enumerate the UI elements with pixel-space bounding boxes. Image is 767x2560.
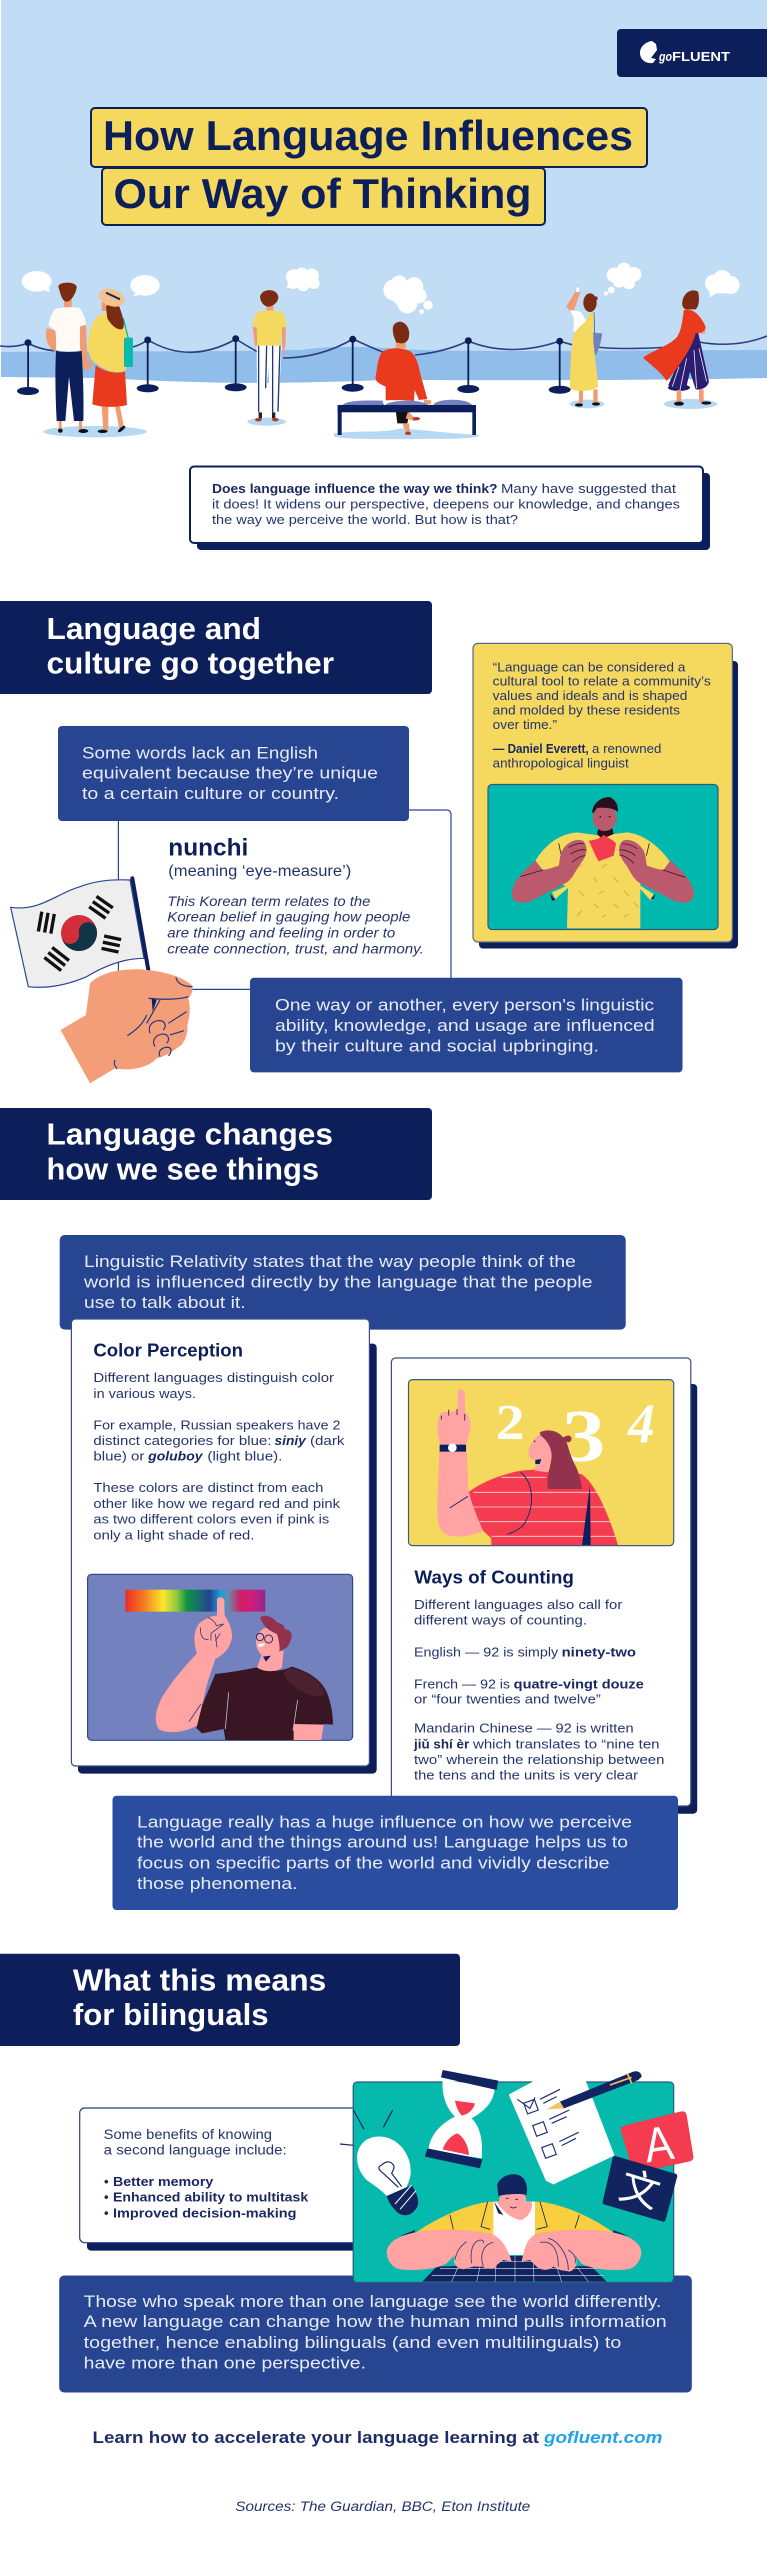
panel: benefits of a second language: • [104, 2205, 109, 2220]
panel: Daniel Everett quote: anthropological linguist [493, 756, 629, 770]
callout: culture and upbringing [250, 978, 682, 1072]
definition: nunchi: nunchi [168, 834, 248, 862]
panel: color perception: siniy [274, 1433, 307, 1448]
panel: ways of counting: French — 92 is [414, 1676, 511, 1691]
panel: ways of counting: two” wherein the relationship between [414, 1752, 664, 1767]
panel: ways of counting: jiǔ shí èr [413, 1736, 469, 1751]
panel: benefits of a second language: Improved decision-making [113, 2205, 297, 2220]
illustration: person typing with hourglass, bulb, checklist and language cards [340, 2070, 693, 2282]
panel: color perception: other like how we regard red and pink [93, 1496, 341, 1511]
callout: speakers of more than one language: Those who speak more than one language see the world differently. [84, 2292, 661, 2311]
panel: benefits of a second language: • [104, 2190, 109, 2204]
icon: hand holding South Korean flag [11, 878, 193, 1083]
heading: language and culture [0, 601, 432, 694]
callout: speakers of more than one language: together, hence enabling bilinguals (and even multilinguals) to [84, 2333, 621, 2352]
panel: color perception: as two different colors even if pink is [93, 1512, 330, 1527]
illustration: woman counting with raised finger: 2 [496, 1394, 525, 1449]
logo: goFLUENT [617, 29, 767, 77]
panel: ways of counting: or “four twenties and twelve” [414, 1692, 601, 1707]
callout: linguistic relativity: Linguistic Relativity states that the way people think of the [84, 1252, 576, 1271]
callout: speakers of more than one language: have more than one perspective. [84, 2353, 366, 2372]
callout: words lacking an English equivalent: equivalent because they’re unique [82, 764, 378, 783]
heading: language changes [0, 1108, 432, 1200]
callout: speakers of more than one language [59, 2276, 692, 2392]
connector lines around nunchi definition [118, 810, 451, 989]
panel: color perception: (light blue). [207, 1449, 282, 1464]
panel: ways of counting: Mandarin Chinese — 92 is written [414, 1721, 634, 1736]
illustration: person typing with hourglass, bulb, checklist and language cards: 文 [613, 2154, 668, 2220]
heading: language changes: how we see things [46, 1151, 319, 1186]
panel: benefits of a second language: a second language include: [104, 2142, 287, 2157]
panel: benefits of a second language [80, 2108, 367, 2251]
callout: words lacking an English equivalent: to a certain culture or country. [82, 784, 339, 803]
panel: color perception: goluboy [147, 1449, 203, 1464]
intro text box: Does language influence the way we think? [212, 481, 498, 496]
title: How Language Influences [103, 112, 633, 159]
panel: color perception: Different languages distinguish color [93, 1370, 335, 1385]
illustration: man tearing paper on teal panel [488, 784, 718, 930]
definition: nunchi: create connection, trust, and harmony. [167, 941, 424, 956]
definition: nunchi: This Korean term relates to the [167, 894, 370, 909]
definition: nunchi: (meaning ‘eye-measure’) [168, 863, 351, 880]
definition: nunchi: are thinking and feeling in order to [167, 925, 396, 940]
panel: Daniel Everett quote: cultural tool to relate a community’s [493, 675, 711, 689]
intro text box [190, 466, 710, 550]
heading: what this means for bilinguals: for bilinguals [73, 1997, 269, 2032]
panel: color perception [71, 1319, 377, 1774]
panel: color perception: in various ways. [93, 1386, 196, 1401]
callout: language influence summary: those phenomena. [137, 1874, 298, 1893]
callout: language influence summary: Language really has a huge influence on how we perceive [137, 1812, 632, 1831]
intro text box: Many have suggested that [501, 481, 676, 496]
panel: Daniel Everett quote: values and ideals and is shaped [493, 689, 687, 703]
heading: language changes: Language changes [46, 1117, 333, 1152]
callout: words lacking an English equivalent [58, 726, 409, 821]
panel: color perception: These colors are distinct from each [93, 1480, 323, 1495]
title [91, 108, 647, 225]
people on the right: woman with phone and woman in red cape [566, 263, 740, 409]
callout: linguistic relativity [60, 1235, 626, 1330]
sources: Sources: The Guardian, BBC, Eton Institute [235, 2499, 530, 2514]
panel: ways of counting: English — 92 is simply [414, 1645, 559, 1660]
logo: goFLUENT: go [658, 49, 672, 64]
hero banner: sky and sea [1, 0, 767, 383]
panel: color perception: For example, Russian speakers have 2 [93, 1417, 340, 1432]
definition: nunchi [167, 834, 424, 956]
panel: ways of counting: different ways of counting. [414, 1613, 587, 1628]
illustration: woman counting with raised finger [408, 1380, 674, 1546]
panel: Daniel Everett quote: a renowned [592, 742, 661, 756]
people on the left: couple and man in striped trousers [22, 268, 320, 437]
panel: benefits of a second language: Better memory [113, 2174, 214, 2189]
panel: color perception: blue) or [93, 1449, 145, 1464]
panel: benefits of a second language: Enhanced ability to multitask [113, 2190, 309, 2204]
illustration: man pointing at color spectrum [88, 1574, 353, 1740]
illustration: person typing with hourglass, bulb, checklist and language cards: A [641, 2116, 677, 2173]
panel: ways of counting [391, 1358, 697, 1814]
logo: goFLUENT: FLUENT [672, 49, 730, 64]
callout: linguistic relativity: use to talk about it. [84, 1293, 246, 1312]
callout: language influence summary: the world and the things around us! Language helps us to [137, 1833, 628, 1852]
rope barrier [0, 335, 767, 395]
call to action: Learn how to accelerate your language learning at [92, 2428, 539, 2447]
callout: language influence summary [112, 1796, 678, 1910]
panel: ways of counting: quatre-vingt douze [514, 1676, 644, 1691]
illustration: woman counting with raised finger: 4 [627, 1393, 655, 1455]
callout: words lacking an English equivalent: Some words lack an English [82, 743, 318, 762]
panel: color perception: distinct categories for blue: [93, 1433, 271, 1448]
callout: culture and upbringing: One way or another, every person's linguistic [275, 995, 655, 1014]
panel: benefits of a second language: Some benefits of knowing [104, 2127, 272, 2142]
panel: ways of counting: ninety-two [562, 1645, 636, 1660]
panel: Daniel Everett quote [473, 643, 738, 948]
panel: Daniel Everett quote: over time.” [493, 718, 557, 732]
callout: culture and upbringing: ability, knowledge, and usage are influenced [275, 1016, 655, 1035]
heading: language and culture: culture go together [46, 646, 334, 681]
panel: ways of counting: which translates to “nine ten [472, 1736, 660, 1751]
heading: what this means for bilinguals [0, 1954, 460, 2046]
callout: speakers of more than one language: A new language can change how the human mind pulls information [84, 2312, 667, 2331]
callout: language influence summary: focus on specific parts of the world and vividly describe [137, 1853, 610, 1872]
panel: color perception: Color Perception [93, 1340, 243, 1360]
call to action: gofluent.com [543, 2428, 662, 2447]
callout: culture and upbringing: by their culture and social upbringing. [275, 1036, 599, 1055]
heading: what this means for bilinguals: What this means [73, 1963, 326, 1998]
panel: ways of counting: Ways of Counting [414, 1568, 574, 1588]
intro text box: it does! It widens our perspective, deepens our knowledge, and changes [212, 496, 681, 512]
panel: Daniel Everett quote: — Daniel Everett, [493, 742, 589, 756]
illustration: woman counting with raised finger: 3 [562, 1396, 605, 1478]
title: Our Way of Thinking [114, 170, 532, 217]
panel: benefits of a second language: • [104, 2174, 109, 2189]
callout: linguistic relativity: world is influenced directly by the language that the people [83, 1272, 593, 1292]
definition: nunchi: Korean belief in gauging how people [167, 910, 410, 925]
heading: language and culture: Language and [46, 611, 261, 646]
panel: Daniel Everett quote: “Language can be considered a [493, 660, 685, 674]
panel: ways of counting: the tens and the units is very clear [414, 1768, 639, 1783]
bench with seated man [334, 275, 479, 439]
intro text box: the way we perceive the world. But how is that? [212, 512, 518, 527]
panel: Daniel Everett quote: and molded by these residents [493, 704, 680, 718]
panel: ways of counting: Different languages also call for [414, 1597, 623, 1612]
panel: color perception: only a light shade of red. [93, 1527, 254, 1542]
panel: color perception: (dark [310, 1433, 345, 1448]
